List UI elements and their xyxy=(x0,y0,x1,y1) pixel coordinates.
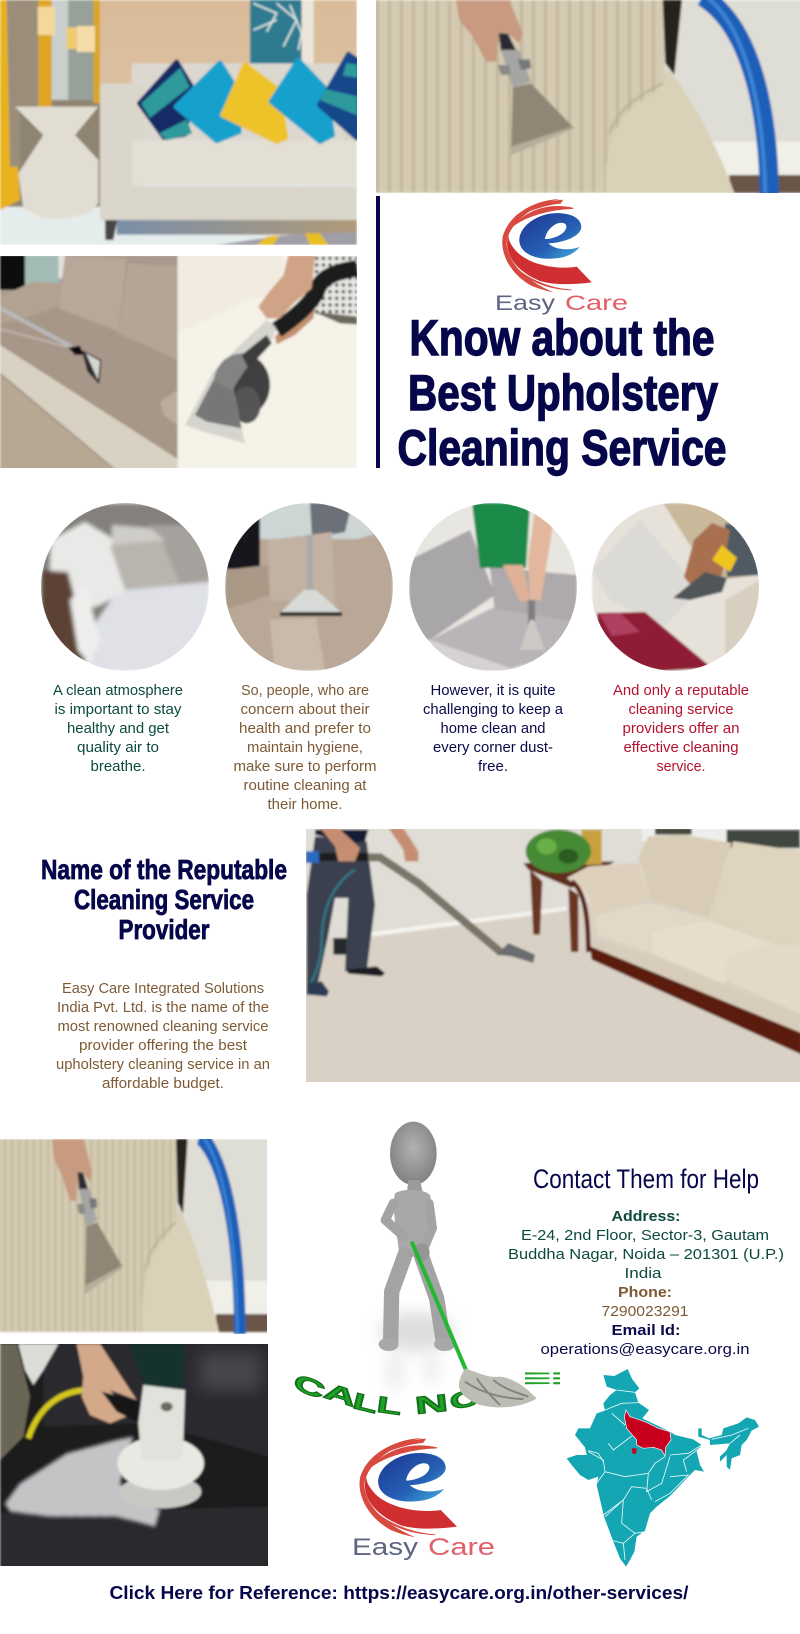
text: hard to keep home clean: every corner dust- xyxy=(433,739,553,756)
heading: name of the reputable provider: Provider xyxy=(118,914,210,945)
circle photo: nozzle on marble surface xyxy=(592,503,760,671)
photo: man vacuuming carpet beside sofa xyxy=(305,828,800,1085)
text: people concerned about health: maintain hygiene, xyxy=(247,739,363,756)
text: call now: O xyxy=(447,1384,483,1415)
heading: name of the reputable provider: Name of the Reputable xyxy=(41,854,287,885)
logo: Easy Care bottom: Easy xyxy=(352,1534,418,1561)
logo: Easy Care: Care xyxy=(565,292,628,315)
photo: living room sofa with colourful cushions xyxy=(0,0,357,245)
text: about Easy Care: provider offering the best xyxy=(79,1037,248,1054)
mop handle xyxy=(412,1242,467,1372)
text: hard to keep home clean: challenging to keep a xyxy=(423,701,564,718)
text: people concerned about health: their home. xyxy=(268,796,342,813)
mop head xyxy=(459,1368,537,1407)
circle photo: white bed with pillows xyxy=(41,503,210,671)
text: people concerned about health: routine cleaning at xyxy=(244,777,367,794)
map: India with Uttar Pradesh highlighted xyxy=(567,1369,759,1567)
illustration: stick figure mopping with call now xyxy=(290,1122,571,1420)
text: contact details: E-24, 2nd Floor, Sector-3, Gautam xyxy=(521,1227,769,1244)
text: contact details: India xyxy=(624,1265,662,1282)
text: clean atmosphere xyxy=(53,682,183,775)
text: hard to keep home clean xyxy=(423,682,564,775)
panel: four reasons xyxy=(41,503,760,813)
text: about Easy Care xyxy=(56,980,270,1092)
text: people concerned about health: health and prefer to xyxy=(239,720,371,737)
title: Best Upholstery xyxy=(408,365,718,421)
text: reputable providers: cleaning service xyxy=(628,701,734,718)
divider bar beside title xyxy=(376,196,380,468)
photo: polishing machine on black leather xyxy=(0,1340,270,1573)
logo: Easy Care bottom xyxy=(352,1438,495,1561)
text: hard to keep home clean: free. xyxy=(478,758,508,775)
floor shadow xyxy=(380,1312,453,1388)
logo: Easy Care xyxy=(495,199,628,315)
text: reputable providers: service. xyxy=(656,758,706,775)
text: reputable providers: effective cleaning xyxy=(624,739,738,756)
text: call now: L xyxy=(350,1388,380,1418)
logo: Easy Care: Easy xyxy=(495,292,556,315)
text: call now: !!! xyxy=(514,1371,571,1386)
photo: taupe sofa and cream sofa being cleaned xyxy=(0,255,357,470)
text: contact details: Address: xyxy=(612,1208,680,1225)
heading: name of the reputable provider xyxy=(41,854,287,945)
figure xyxy=(379,1122,455,1351)
text: contact details: Phone: xyxy=(618,1284,672,1301)
heading: name of the reputable provider: Cleaning Service xyxy=(74,884,254,915)
text: clean atmosphere: is important to stay xyxy=(54,701,182,718)
text: hard to keep home clean: However, it is quite xyxy=(430,682,556,699)
text: about Easy Care: upholstery cleaning service in an xyxy=(56,1056,270,1073)
title xyxy=(398,310,726,476)
text: about Easy Care: India Pvt. Ltd. is the name of the xyxy=(57,999,269,1016)
text: clean atmosphere: quality air to xyxy=(77,739,159,756)
text: about Easy Care: affordable budget. xyxy=(102,1075,224,1092)
text: hard to keep home clean: home clean and xyxy=(440,720,546,737)
reference link: Click Here for Reference: https://easycare.org.in/other-services/ xyxy=(110,1582,688,1603)
text: contact details: 7290023291 xyxy=(602,1303,688,1320)
text: people concerned about health: So, people, who are xyxy=(241,682,369,699)
text: people concerned about health: make sure to perform xyxy=(234,758,376,775)
text: contact details: operations@easycare.org.in xyxy=(540,1341,750,1358)
text: contact details: Buddha Nagar, Noida – 201301 (U.P.) xyxy=(508,1246,784,1263)
circle photo: person cleaning grey sofa xyxy=(409,503,577,671)
text: people concerned about health xyxy=(234,682,376,813)
text: contact details: Email Id: xyxy=(612,1322,680,1339)
text: about Easy Care: most renowned cleaning service xyxy=(58,1018,268,1035)
text: call now xyxy=(290,1369,571,1420)
text: contact details xyxy=(508,1208,784,1358)
text: call now: W xyxy=(477,1377,513,1407)
text: reputable providers xyxy=(613,682,749,775)
text: call now: A xyxy=(321,1378,360,1412)
logo: Easy Care bottom: Care xyxy=(428,1534,495,1561)
text: about Easy Care: Easy Care Integrated Solutions xyxy=(62,980,264,997)
text: call now: N xyxy=(414,1389,449,1419)
text: clean atmosphere: healthy and get xyxy=(67,720,170,737)
title: Cleaning Service xyxy=(398,420,726,476)
text: people concerned about health: concern about their xyxy=(240,701,370,718)
text: call now: L xyxy=(375,1392,403,1420)
text: clean atmosphere: breathe. xyxy=(90,758,146,775)
photo: nozzle cleaning striped upholstery chair xyxy=(366,0,800,195)
text: call now: C xyxy=(290,1369,329,1404)
photo: nozzle on upholstery close up xyxy=(0,1136,278,1334)
text: clean atmosphere: A clean atmosphere xyxy=(53,682,183,699)
text: reputable providers: And only a reputable xyxy=(613,682,749,699)
heading: contact: Contact Them for Help xyxy=(533,1164,759,1194)
text: reputable providers: providers offer an xyxy=(622,720,740,737)
circle photo: beige sofa cleaning wand xyxy=(225,503,393,671)
title: Know about the xyxy=(410,310,714,366)
